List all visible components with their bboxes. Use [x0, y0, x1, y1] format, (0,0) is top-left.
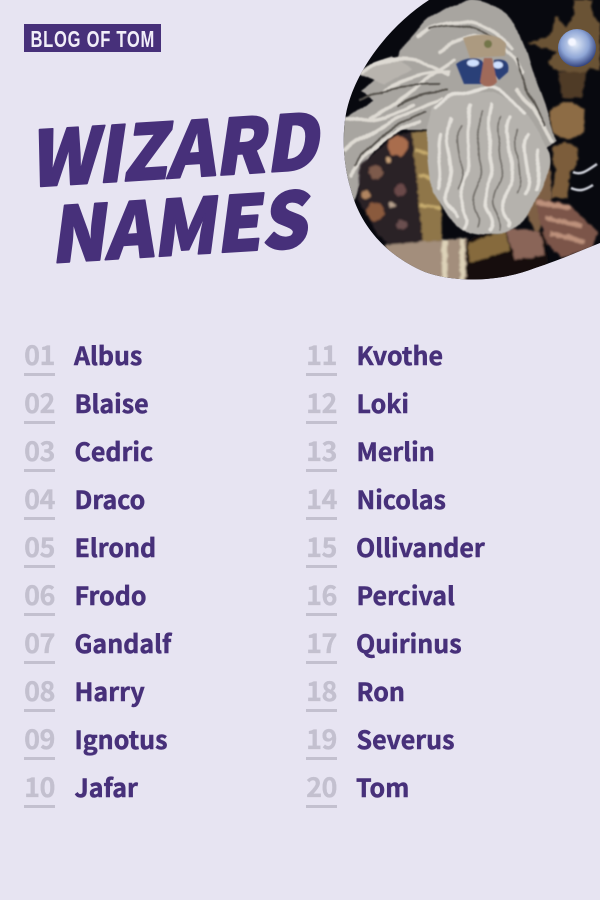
item 02: 02	[24, 382, 55, 421]
brand badge: BLOG OF TOM	[30, 27, 154, 52]
item 01: Albus	[74, 337, 142, 373]
item 08: 08	[24, 670, 55, 709]
item 18: Ron	[356, 673, 405, 709]
item 12: Loki	[356, 385, 409, 421]
list: column 1	[24, 334, 172, 808]
list: column 2	[306, 334, 485, 808]
item 04: 04	[24, 478, 55, 517]
item 19: 19	[306, 718, 337, 757]
item 18	[306, 670, 405, 712]
item 08: Harry	[74, 673, 145, 709]
item 12	[306, 382, 409, 424]
item 11: 11	[306, 334, 337, 373]
item 04	[24, 478, 145, 520]
item 15: 15	[306, 526, 337, 565]
item 13	[306, 430, 435, 472]
staff	[528, 0, 600, 198]
item 11	[306, 334, 443, 376]
wizard portrait	[344, 0, 600, 280]
hair	[343, 0, 556, 210]
item 09: Ignotus	[74, 721, 167, 757]
item 10: Jafar	[74, 769, 138, 805]
item 07	[24, 622, 172, 664]
item 04: Draco	[74, 481, 145, 517]
item 11: Kvothe	[356, 337, 443, 373]
item 09	[24, 718, 167, 760]
item 14: 14	[306, 478, 337, 517]
item 20: Tom	[356, 769, 409, 805]
item 02: Blaise	[74, 385, 149, 421]
item 05	[24, 526, 156, 568]
item 16: 16	[306, 574, 337, 613]
item 17: Quirinus	[356, 625, 462, 661]
item 05: 05	[24, 526, 55, 565]
item 20	[306, 766, 409, 808]
title	[27, 90, 331, 280]
item 13: Merlin	[356, 433, 435, 469]
item 15	[306, 526, 485, 568]
item 01	[24, 334, 142, 376]
robe	[358, 130, 598, 282]
item 06: 06	[24, 574, 55, 613]
item 16	[306, 574, 455, 616]
face	[456, 35, 508, 86]
item 14	[306, 478, 446, 520]
item 07: 07	[24, 622, 55, 661]
beard	[427, 86, 550, 236]
item 13: 13	[306, 430, 337, 469]
item 03: 03	[24, 430, 55, 469]
item 14: Nicolas	[356, 481, 446, 517]
item 03	[24, 430, 153, 472]
item 10	[24, 766, 138, 808]
item 20: 20	[306, 766, 337, 805]
item 16: Percival	[356, 577, 455, 613]
item 19: Severus	[356, 721, 454, 757]
item 06	[24, 574, 147, 616]
item 10: 10	[24, 766, 55, 805]
item 17	[306, 622, 462, 664]
item 02	[24, 382, 149, 424]
item 07: Gandalf	[74, 625, 171, 661]
item 12: 12	[306, 382, 337, 421]
item 15: Ollivander	[356, 529, 485, 565]
item 05: Elrond	[74, 529, 156, 565]
item 19	[306, 718, 454, 760]
item 08	[24, 670, 145, 712]
item 03: Cedric	[74, 433, 153, 469]
item 17: 17	[306, 622, 337, 661]
item 09: 09	[24, 718, 55, 757]
item 01: 01	[24, 334, 55, 373]
item 18: 18	[306, 670, 337, 709]
item 06: Frodo	[74, 577, 147, 613]
